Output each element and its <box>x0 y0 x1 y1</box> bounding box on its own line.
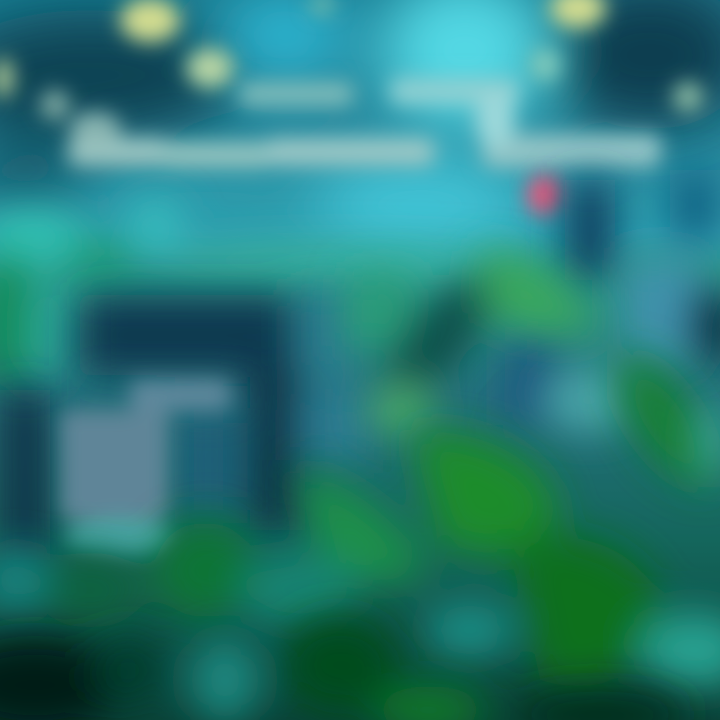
left teal haze <box>0 201 520 395</box>
sky glow and dark corners <box>0 0 720 250</box>
pink marker <box>527 175 563 215</box>
lower foliage <box>0 400 720 688</box>
dark buildings <box>0 290 370 560</box>
lights <box>0 0 703 120</box>
blurred heading text bands <box>68 78 662 168</box>
upper leaves <box>345 250 715 490</box>
dark foreground foliage <box>0 615 690 720</box>
right side towers <box>505 170 720 432</box>
grey building <box>60 380 230 558</box>
